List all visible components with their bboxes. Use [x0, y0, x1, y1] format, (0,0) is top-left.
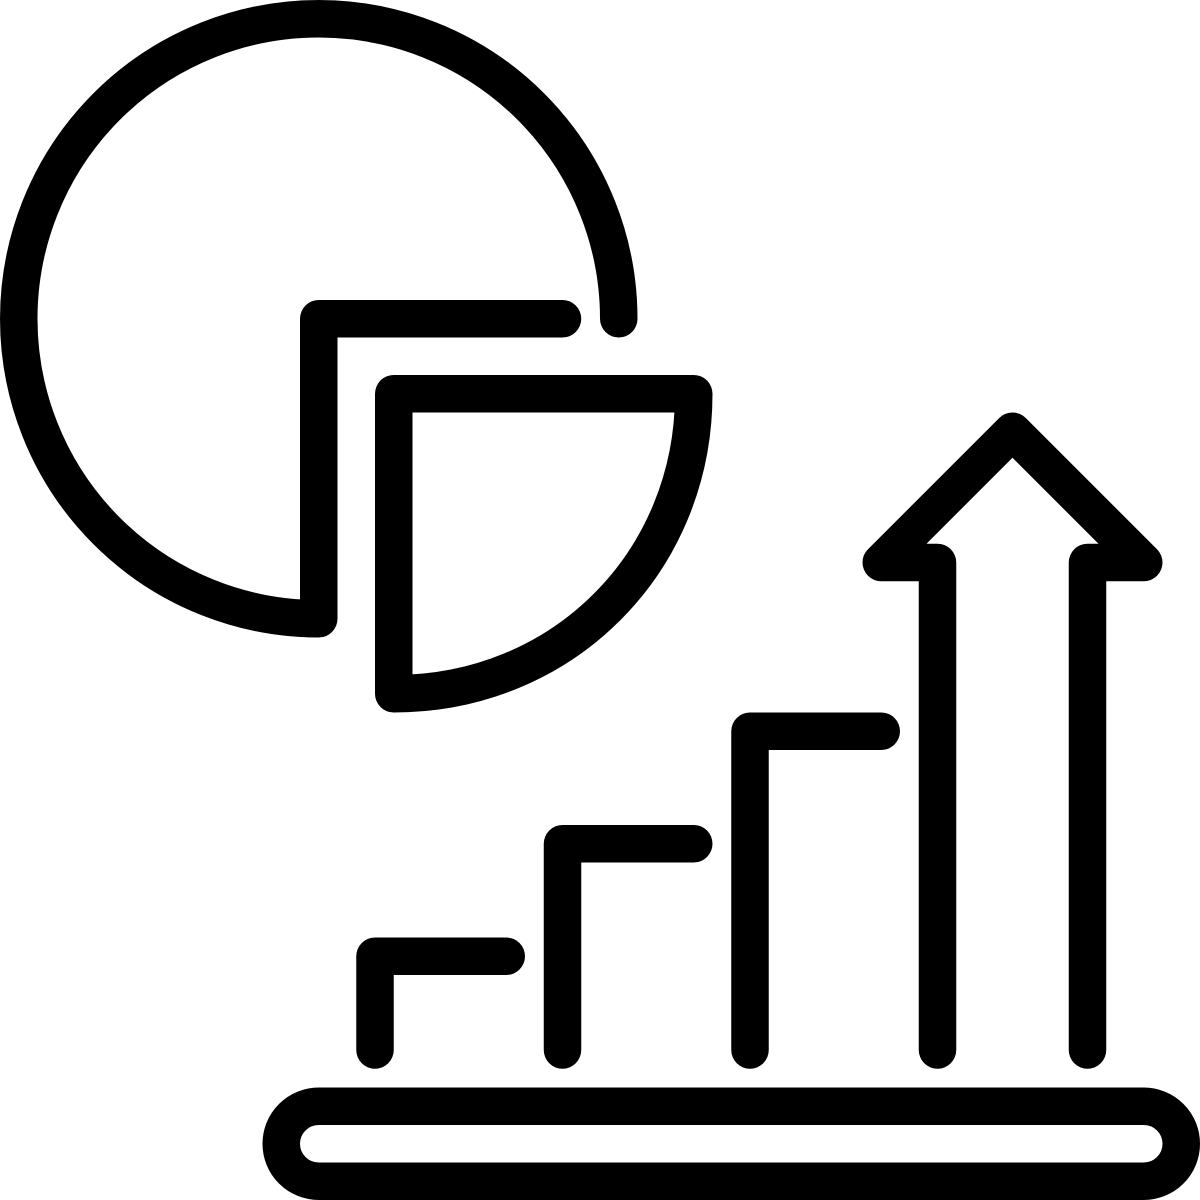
chart base platform — [281, 1106, 1181, 1181]
bar 3 — [750, 731, 881, 1050]
icon: rising arrow — [881, 431, 1144, 1050]
icon: detached pie slice — [394, 394, 694, 694]
bar 2 — [562, 844, 694, 1050]
icon: pie chart body with missing quarter — [19, 19, 619, 619]
bar 1 — [375, 956, 506, 1050]
